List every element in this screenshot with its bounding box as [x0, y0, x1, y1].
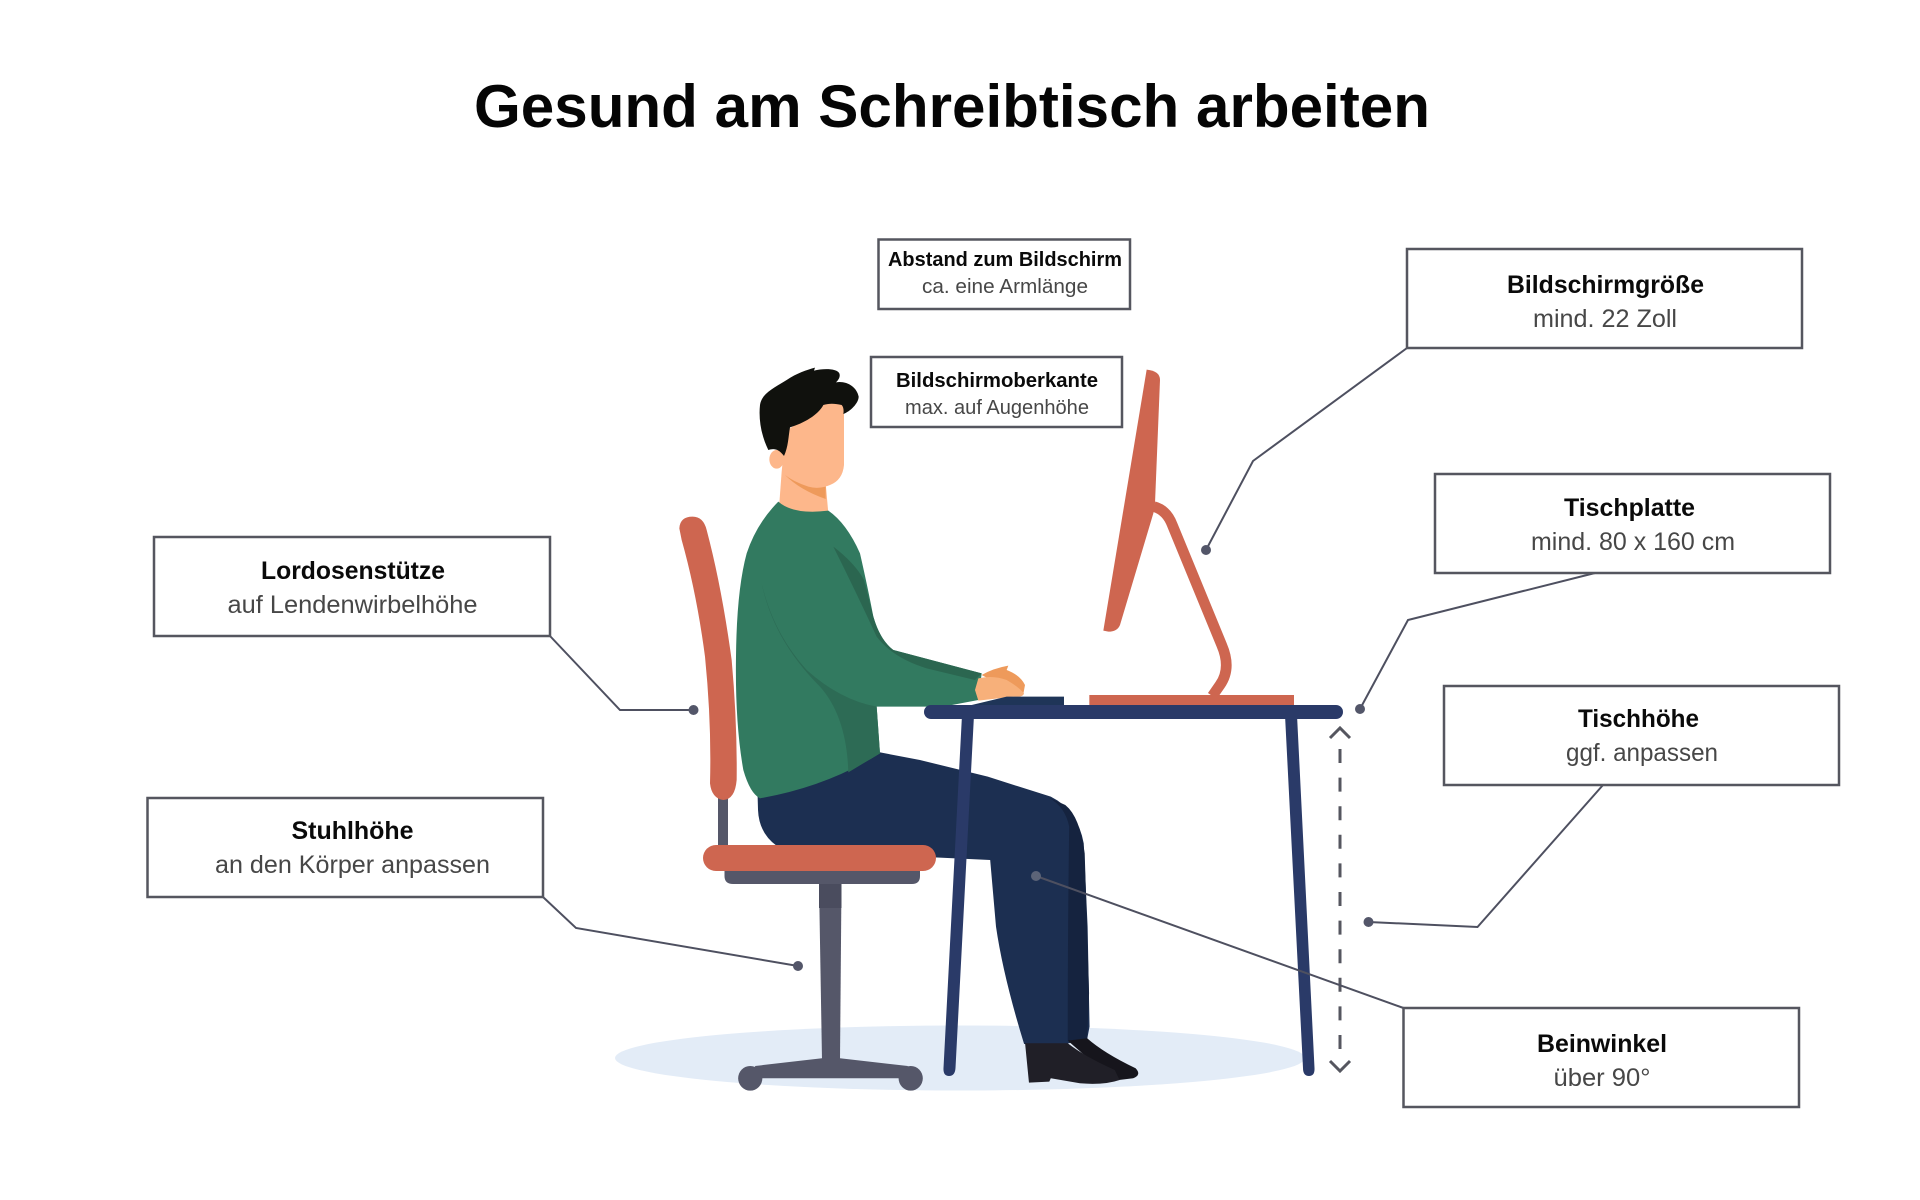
leader: Tischplatte: [1355, 573, 1595, 714]
trousers: [758, 752, 1090, 1044]
dashed line: [1338, 749, 1342, 1050]
chair back post: [718, 795, 728, 847]
right desk leg: [1285, 715, 1315, 1076]
keyboard: [972, 697, 1064, 707]
sweater sleeve shade: [833, 547, 982, 680]
monitor stand: [1154, 507, 1226, 696]
callout: Bildschirmgröße: [1407, 249, 1802, 348]
ear: [769, 450, 784, 469]
hair: [760, 368, 859, 456]
callout: Tischhöhe: [1444, 686, 1839, 785]
callout: Bildschirmoberkante: Bildschirmoberkante: [896, 369, 1098, 392]
callout: Bildschirmgröße: mind. 22 Zoll: [1533, 305, 1677, 333]
callout: Lordosenstütze: [154, 537, 550, 636]
chair base and casters: [738, 1058, 923, 1091]
callout: Lordosenstütze: Lordosenstütze: [261, 557, 445, 585]
callout: Lordosenstütze: auf Lendenwirbelhöhe: [228, 591, 478, 619]
desk top: [924, 705, 1343, 719]
callout: Tischplatte: Tischplatte: [1564, 494, 1695, 522]
leader: Tischhöhe: [1364, 785, 1603, 927]
sweater torso shade: [762, 583, 880, 772]
monitor screen: [1103, 370, 1160, 632]
illustration: floor shadow: [615, 1026, 1305, 1090]
chair pole shade: [819, 883, 842, 908]
illustration: office chair: [718, 795, 923, 1091]
callout: Tischplatte: mind. 80 x 160 cm: [1531, 528, 1735, 556]
leader: Beinwinkel: [1031, 871, 1404, 1008]
far shoe: [1068, 1038, 1138, 1081]
illustration: person legs: [758, 752, 1138, 1084]
callout: Bildschirmgröße: Bildschirmgröße: [1507, 271, 1704, 299]
left desk leg: [943, 715, 974, 1076]
front hand: [975, 677, 1024, 701]
illustration: upper body and chair backrest: [679, 368, 1064, 800]
callout: Bildschirmoberkante: max. auf Augenhöhe: [905, 396, 1089, 419]
callout: Tischplatte: [1435, 474, 1830, 573]
chair pole: [819, 883, 842, 1060]
title: Gesund am Schreibtisch arbeiten: [474, 73, 1430, 140]
callout: Abstand zum Bildschirm: ca. eine Armlänge: [922, 275, 1088, 298]
callout: Bildschirmoberkante: [871, 357, 1122, 427]
sweater: [736, 502, 982, 798]
callout: Tischhöhe: ggf. anpassen: [1566, 739, 1718, 767]
callout: Tischhöhe: Tischhöhe: [1578, 705, 1699, 733]
neck shadow: [785, 475, 826, 499]
near shoe: [1025, 1043, 1120, 1084]
callout: Beinwinkel: [1404, 1008, 1799, 1107]
callout: Abstand zum Bildschirm: Abstand zum Bildschirm: [888, 248, 1122, 271]
leader: Stuhlhöhe: [543, 897, 803, 971]
trousers shade: [1048, 797, 1089, 1041]
upper chevron: [1330, 728, 1350, 738]
face: [782, 402, 844, 488]
lower chevron: [1330, 1061, 1350, 1071]
monitor base: [1089, 695, 1294, 705]
table height arrow: [1330, 728, 1350, 1071]
neck: [779, 472, 828, 517]
callout: Abstand zum Bildschirm: [878, 240, 1130, 309]
back hand: [982, 666, 1025, 694]
leader: Lordosenstütze: [550, 636, 698, 715]
chair seat underside: [724, 868, 920, 884]
illustration: chair seat cushion: [703, 845, 936, 871]
chair backrest: [679, 517, 737, 800]
callout: Beinwinkel: über 90°: [1554, 1064, 1650, 1092]
illustration: monitor: [1089, 370, 1294, 705]
callout: Stuhlhöhe: [148, 798, 543, 897]
illustration: desk: [924, 705, 1343, 1076]
callout: Stuhlhöhe: Stuhlhöhe: [292, 817, 414, 845]
callout: Stuhlhöhe: an den Körper anpassen: [215, 851, 490, 879]
leader: Bildschirmgröße: [1201, 348, 1407, 555]
callout: Beinwinkel: Beinwinkel: [1537, 1030, 1667, 1058]
